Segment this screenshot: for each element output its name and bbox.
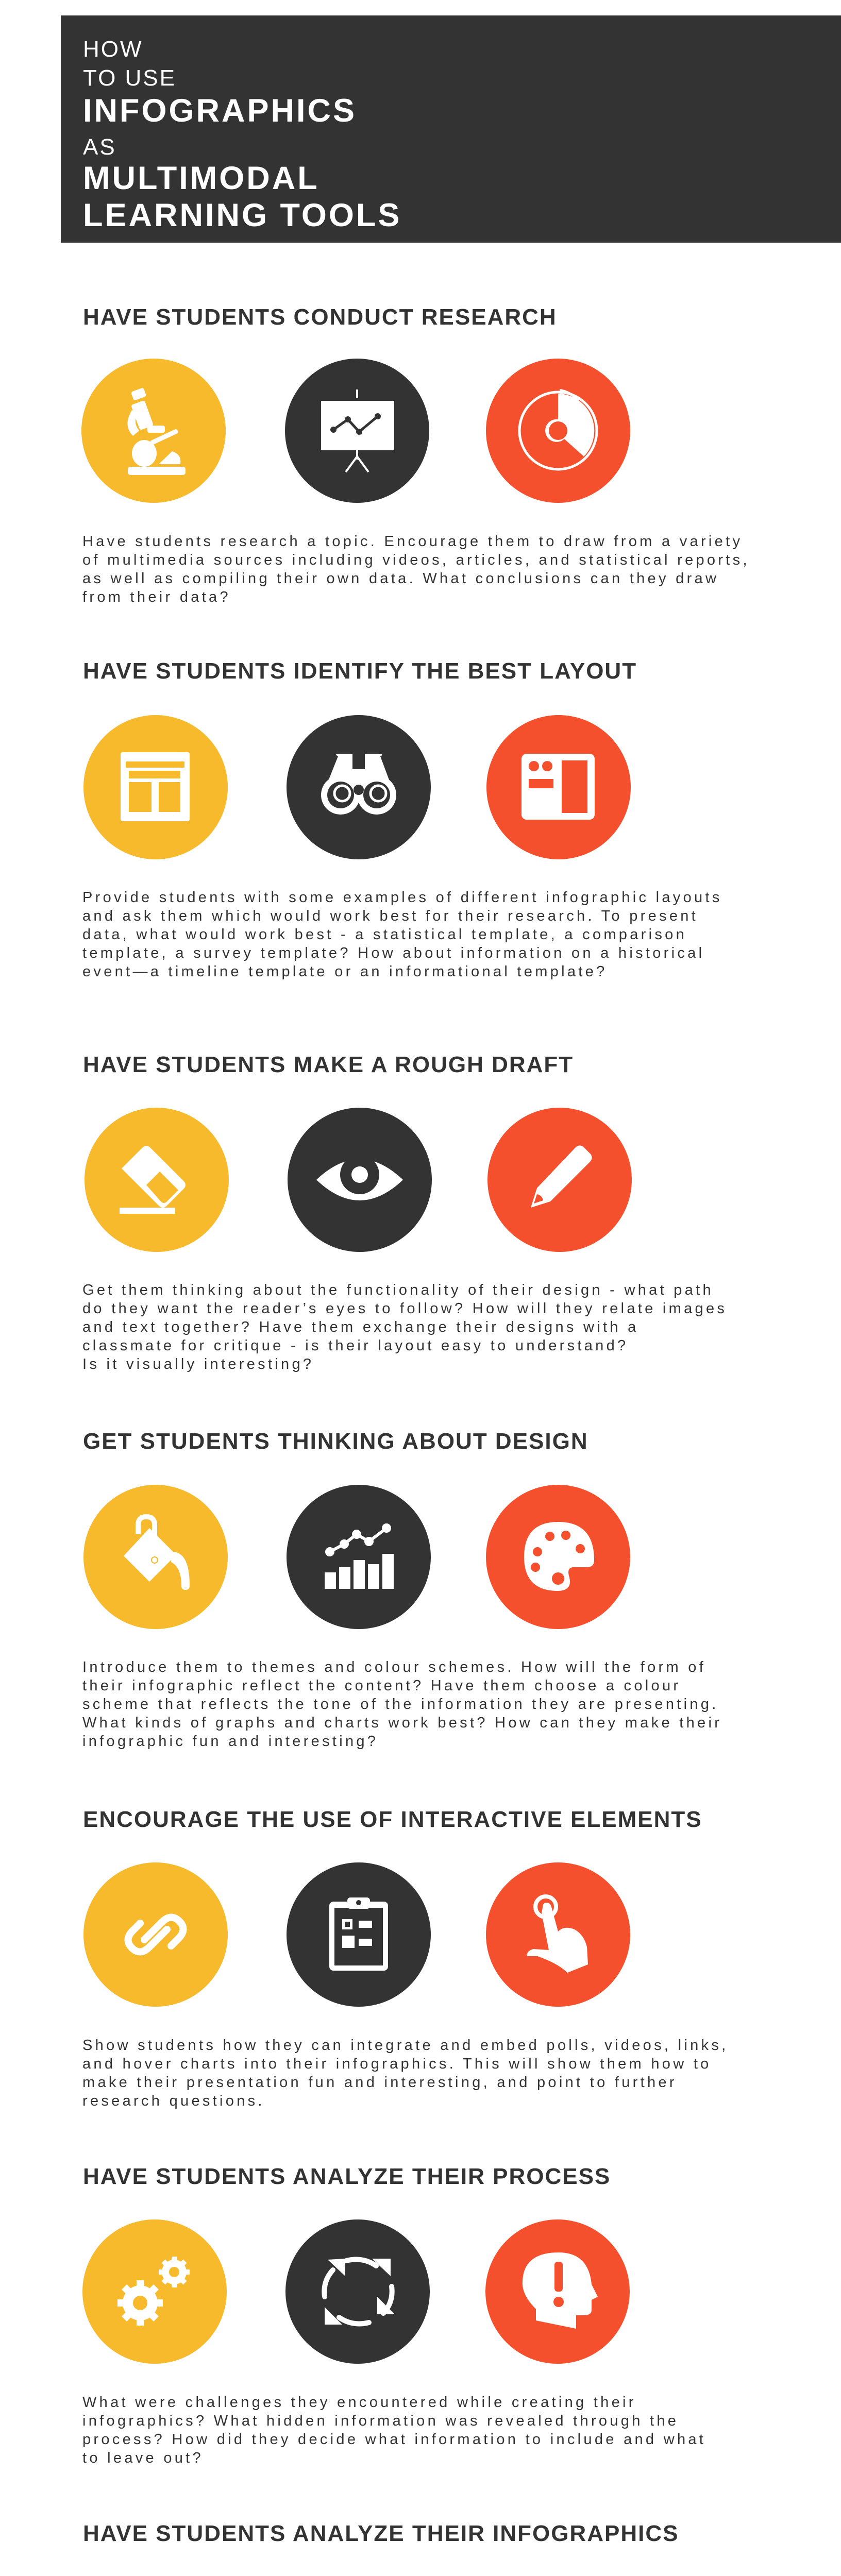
icon: eye xyxy=(288,1108,432,1252)
heading: HAVE STUDENTS ANALYZE THEIR PROCESS xyxy=(83,2164,611,2189)
icon: pencil xyxy=(487,1108,632,1252)
paragraph: research questions. xyxy=(82,2093,265,2109)
paragraph xyxy=(82,533,750,605)
paragraph: Provide students with some examples of different infographic layouts xyxy=(82,889,722,906)
header banner xyxy=(61,15,841,243)
heading: HAVE STUDENTS MAKE A ROUGH DRAFT xyxy=(83,1052,574,1077)
icon: head with exclamation xyxy=(485,2219,630,2364)
section 5: interactive elements xyxy=(82,1807,728,2109)
paragraph: to leave out? xyxy=(82,2450,204,2466)
paragraph xyxy=(82,889,722,980)
paragraph: infographic fun and interesting? xyxy=(82,1733,378,1750)
icon: link xyxy=(83,1862,228,2007)
icon: binoculars xyxy=(287,715,431,859)
icon: gears xyxy=(82,2219,227,2364)
title: MULTIMODAL xyxy=(83,160,319,196)
title: HOW xyxy=(83,37,143,62)
paragraph: Show students how they can integrate and embed polls, videos, links, xyxy=(82,2037,728,2054)
title: AS xyxy=(83,134,116,160)
paragraph: classmate for critique - is their layout easy to understand? xyxy=(82,1337,628,1354)
title: LEARNING TOOLS xyxy=(83,197,401,233)
heading: ENCOURAGE THE USE OF INTERACTIVE ELEMENTS xyxy=(83,1807,702,1832)
icon: layout template xyxy=(83,715,228,859)
paragraph: Is it visually interesting? xyxy=(82,1356,314,1372)
icon: clipboard xyxy=(287,1862,431,2007)
icon: eraser xyxy=(85,1108,229,1252)
icon: chart with trend xyxy=(287,1485,431,1629)
icon: refresh arrows xyxy=(285,2219,430,2364)
paragraph xyxy=(82,1282,727,1372)
title: INFOGRAPHICS xyxy=(83,93,357,129)
paragraph: scheme that reflects the tone of the information they are presenting. xyxy=(82,1696,719,1713)
icon: microscope xyxy=(81,359,226,503)
heading: HAVE STUDENTS IDENTIFY THE BEST LAYOUT xyxy=(83,658,637,684)
paragraph: and hover charts into their infographics. This will show them how to xyxy=(82,2056,712,2072)
paragraph: What were challenges they encountered while creating their xyxy=(82,2394,636,2411)
icon: palette xyxy=(486,1485,630,1629)
paragraph: and text together? Have them exchange their designs with a xyxy=(82,1319,639,1335)
paragraph: Get them thinking about the functionality of their design - what path xyxy=(82,1282,714,1298)
title xyxy=(83,37,401,233)
paragraph: make their presentation fun and interesting, and point to further xyxy=(82,2074,677,2091)
paragraph: Have students research a topic. Encourage them to draw from a variety xyxy=(82,533,743,550)
paragraph: their infographic reflect the content? Have them choose a colour xyxy=(82,1677,681,1694)
paragraph xyxy=(82,1659,722,1750)
heading: GET STUDENTS THINKING ABOUT DESIGN xyxy=(83,1429,588,1454)
icon: donut chart xyxy=(486,359,630,503)
section 2: best layout xyxy=(82,658,722,980)
icon: hand pointer xyxy=(486,1862,630,2007)
section 1: conduct research xyxy=(81,304,750,605)
paragraph: template, a survey template? How about information on a historical xyxy=(82,945,704,961)
paragraph xyxy=(82,2394,706,2466)
paragraph xyxy=(82,2037,728,2109)
paragraph: What kinds of graphs and charts work best? How can they make their xyxy=(82,1715,722,1731)
section 4: design xyxy=(82,1429,722,1750)
icon: presentation board xyxy=(285,359,429,503)
paragraph: Introduce them to themes and colour schemes. How will the form of xyxy=(82,1659,706,1675)
paragraph: infographics? What hidden information was revealed through the xyxy=(82,2413,679,2429)
icon: layout panel xyxy=(486,715,631,859)
section 6: analyze process xyxy=(82,2164,706,2466)
paragraph: process? How did they decide what information to include and what xyxy=(82,2431,706,2448)
title: TO USE xyxy=(83,65,176,91)
icon: paint bucket xyxy=(83,1485,228,1629)
paragraph: from their data? xyxy=(82,589,231,605)
paragraph: data, what would work best - a statistical template, a comparison xyxy=(82,926,687,943)
paragraph: as well as compiling their own data. What conclusions can they draw xyxy=(82,570,719,587)
paragraph: of multimedia sources including videos, articles, and statistical reports, xyxy=(82,552,750,568)
paragraph: do they want the reader’s eyes to follow? How will they relate images xyxy=(82,1300,727,1317)
heading: HAVE STUDENTS ANALYZE THEIR INFOGRAPHICS xyxy=(83,2521,679,2546)
heading: HAVE STUDENTS CONDUCT RESEARCH xyxy=(83,304,557,330)
paragraph: event—a timeline template or an informational template? xyxy=(82,963,607,980)
section 3: rough draft xyxy=(82,1052,727,1372)
paragraph: and ask them which would work best for their research. To present xyxy=(82,908,698,924)
